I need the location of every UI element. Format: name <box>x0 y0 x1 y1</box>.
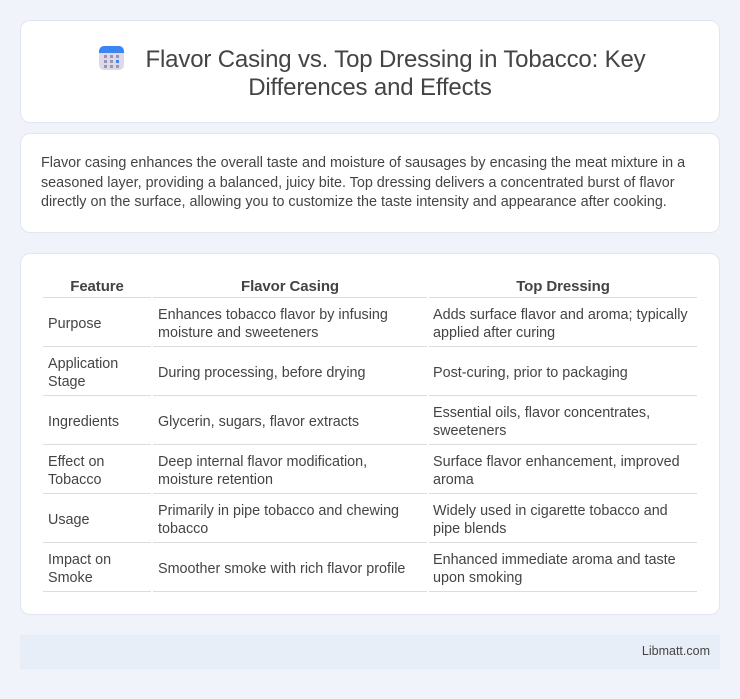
cell: Ingredients top dressing <box>433 405 650 439</box>
text block: introduction: seasoned layer, providing a balanced, juicy bite. Top dressing delivers a concentrated burst of flavor <box>41 174 675 190</box>
cell: Ingredients top dressing: Essential oils, flavor concentrates, <box>433 405 650 421</box>
row: Purpose: Purpose <box>48 316 101 332</box>
cell: Purpose flavor casing <box>158 307 388 341</box>
cell: Usage top dressing: pipe blends <box>433 521 506 537</box>
cell: Usage top dressing: Widely used in cigarette tobacco and <box>433 503 668 519</box>
cell: Purpose top dressing <box>433 307 688 341</box>
footer bar <box>20 635 720 669</box>
row: Impact on Smoke: Impact on <box>48 552 111 568</box>
cell: Application top dressing: Post-curing, prior to packaging <box>433 365 628 381</box>
cell: Purpose top dressing: Adds surface flavor and aroma; typically <box>433 307 688 323</box>
cell: Usage flavor casing: Primarily in pipe tobacco and chewing <box>158 503 399 519</box>
cell: Ingredients flavor casing: Glycerin, sugars, flavor extracts <box>158 414 359 430</box>
icon: calendar <box>99 46 124 70</box>
title: Flavor Casing vs. Top Dressing in Tobacco: Key <box>146 46 646 73</box>
cell: Effect flavor casing: Deep internal flavor modification, <box>158 454 367 470</box>
cell: Purpose top dressing: applied after curing <box>433 325 555 341</box>
row: Impact on Smoke: Smoke <box>48 570 93 586</box>
footer credit: Libmatt.com <box>642 644 710 658</box>
row: Ingredients: Ingredients <box>48 414 119 430</box>
cell: Effect flavor casing: moisture retention <box>158 472 273 488</box>
row: Effect on Tobacco <box>48 454 104 488</box>
cell: Purpose flavor casing: moisture and sweeteners <box>158 325 318 341</box>
cell: Usage flavor casing: tobacco <box>158 521 208 537</box>
cell: Effect top dressing: Surface flavor enhancement, improved <box>433 454 680 470</box>
title <box>146 46 646 101</box>
row: Effect on Tobacco: Tobacco <box>48 472 101 488</box>
row: Application Stage: Stage <box>48 374 86 390</box>
table header: Top Dressing: Top Dressing <box>516 278 610 295</box>
cell: Impact flavor casing: Smoother smoke with rich flavor profile <box>158 561 405 577</box>
row: Impact on Smoke <box>48 552 111 586</box>
table header: Feature: Feature <box>70 278 124 295</box>
cell: Impact top dressing: upon smoking <box>433 570 522 586</box>
text block: introduction: Flavor casing enhances the overall taste and moisture of sausages by encasing the meat mixture in a <box>41 155 685 171</box>
cell: Impact top dressing: Enhanced immediate aroma and taste <box>433 552 676 568</box>
cell: Ingredients top dressing: sweeteners <box>433 423 506 439</box>
panel: title header <box>20 20 720 123</box>
cell: Effect top dressing <box>433 454 680 488</box>
text block: introduction <box>41 155 686 210</box>
row: Application Stage <box>48 356 118 390</box>
cell: Usage top dressing <box>433 503 668 537</box>
text block: introduction: directly on the surface, allowing you to customize the taste intensity and appearance after cooking. <box>41 194 667 210</box>
cell: Usage flavor casing <box>158 503 399 537</box>
row: Usage: Usage <box>48 512 90 528</box>
row: Application Stage: Application <box>48 356 118 372</box>
cell: Effect flavor casing <box>158 454 367 488</box>
cell: Impact top dressing <box>433 552 676 586</box>
panel: introduction <box>20 133 720 233</box>
cell: Purpose flavor casing: Enhances tobacco flavor by infusing <box>158 307 388 323</box>
cell: Effect top dressing: aroma <box>433 472 474 488</box>
title: Differences and Effects <box>248 74 492 101</box>
row: Effect on Tobacco: Effect on <box>48 454 104 470</box>
panel: comparison table <box>20 253 720 615</box>
cell: Application flavor casing: During processing, before drying <box>158 365 366 381</box>
table header: Flavor Casing: Flavor Casing <box>241 278 339 295</box>
